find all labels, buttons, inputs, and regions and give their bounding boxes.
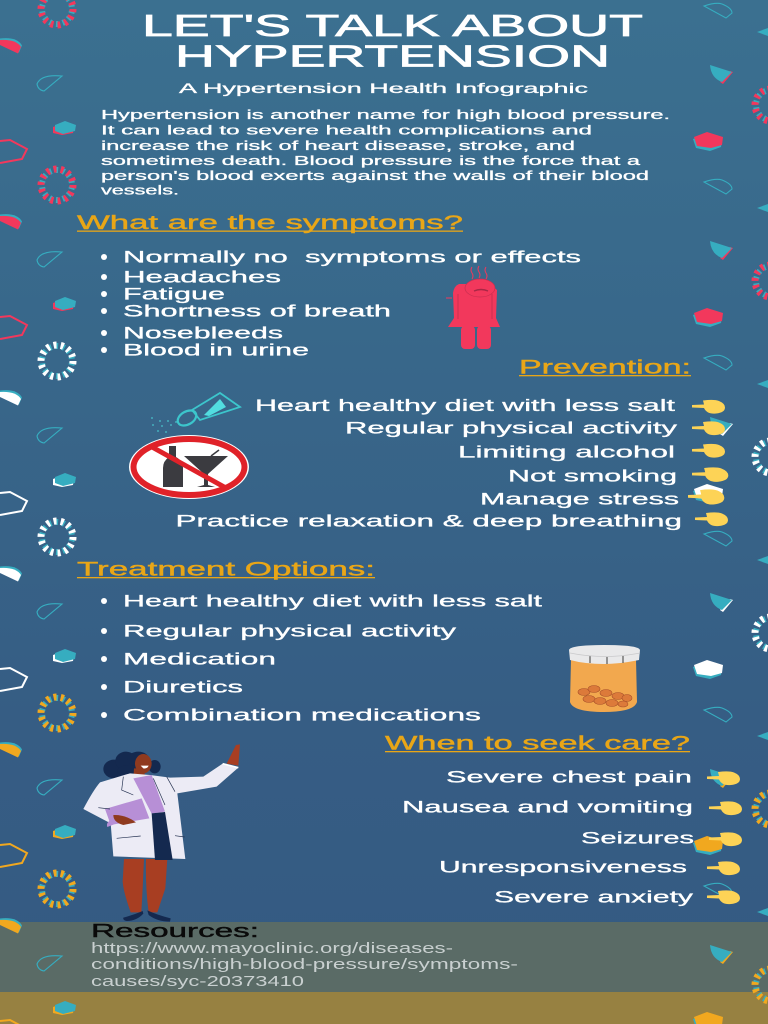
treatment list: Heart healthy diet with less salt <box>123 592 543 610</box>
treatment list: Medication <box>123 650 276 668</box>
intro paragraph: increase the risk of heart disease, stroke, and <box>101 138 575 153</box>
prevention list: Practice relaxation & deep breathing <box>176 512 682 530</box>
intro paragraph <box>101 107 670 198</box>
footer band <box>0 992 768 1024</box>
treatment list: Combination medications <box>123 706 481 724</box>
resources link: https://www.mayoclinic.org/diseases- <box>91 940 453 957</box>
symptoms list: Normally no symptoms or effects <box>123 248 581 266</box>
prevention list <box>176 397 682 530</box>
care list <box>402 768 694 906</box>
title: LET'S TALK ABOUT <box>142 8 643 43</box>
title: HYPERTENSION <box>175 38 610 74</box>
care list: Unresponsiveness <box>439 858 687 876</box>
icons: care pointing hands <box>707 771 742 904</box>
prevention list: Not smoking <box>508 468 677 486</box>
icon: salt shaker <box>151 393 240 433</box>
symptoms list: Fatigue <box>123 286 225 304</box>
treatment list: Diuretics <box>123 678 243 696</box>
heading: treatment options: Treatment Options: <box>77 560 375 580</box>
title <box>142 8 643 74</box>
icons: prevention pointing hands <box>688 400 728 526</box>
symptoms list <box>101 248 581 360</box>
heading: symptoms: What are the symptoms? <box>77 213 463 234</box>
icon: pill bottle <box>569 645 640 712</box>
resources band <box>0 922 768 992</box>
intro paragraph: vessels. <box>101 182 179 198</box>
resources link: causes/syc-20373410 <box>91 973 304 990</box>
care list: Severe anxiety <box>494 888 694 906</box>
care list: Seizures <box>581 830 694 848</box>
intro paragraph: sometimes death. Blood pressure is the force that a <box>101 153 641 168</box>
intro paragraph: It can lead to severe health complications and <box>101 122 592 138</box>
resources link <box>91 940 518 990</box>
heading: when to seek care: When to seek care? <box>385 734 690 754</box>
icon: person with headache <box>446 266 500 349</box>
symptoms list: Headaches <box>123 268 281 286</box>
prevention list: Manage stress <box>480 490 679 508</box>
symptoms list: Shortness of breath <box>123 302 391 320</box>
prevention list: Heart healthy diet with less salt <box>255 397 676 415</box>
symptoms list: Blood in urine <box>123 342 309 360</box>
resources <box>91 921 518 990</box>
intro paragraph: person's blood exerts against the walls of their blood <box>101 168 649 183</box>
illustration: doctor <box>83 744 240 922</box>
prevention list: Limiting alcohol <box>458 444 675 462</box>
heading: prevention: Prevention: <box>519 358 691 378</box>
icon: no alcohol sign <box>129 435 249 499</box>
prevention list: Regular physical activity <box>345 420 678 438</box>
care list: Severe chest pain <box>446 768 692 786</box>
treatment list: Regular physical activity <box>123 622 457 640</box>
care list: Nausea and vomiting <box>402 798 693 816</box>
treatment list <box>101 592 543 724</box>
resources link: conditions/high-blood-pressure/symptoms- <box>91 956 518 973</box>
intro paragraph: Hypertension is another name for high blood pressure. <box>101 107 670 122</box>
resources heading: Resources: <box>91 921 259 941</box>
symptoms list: Nosebleeds <box>123 324 283 342</box>
subtitle: A Hypertension Health Infographic <box>179 80 588 96</box>
